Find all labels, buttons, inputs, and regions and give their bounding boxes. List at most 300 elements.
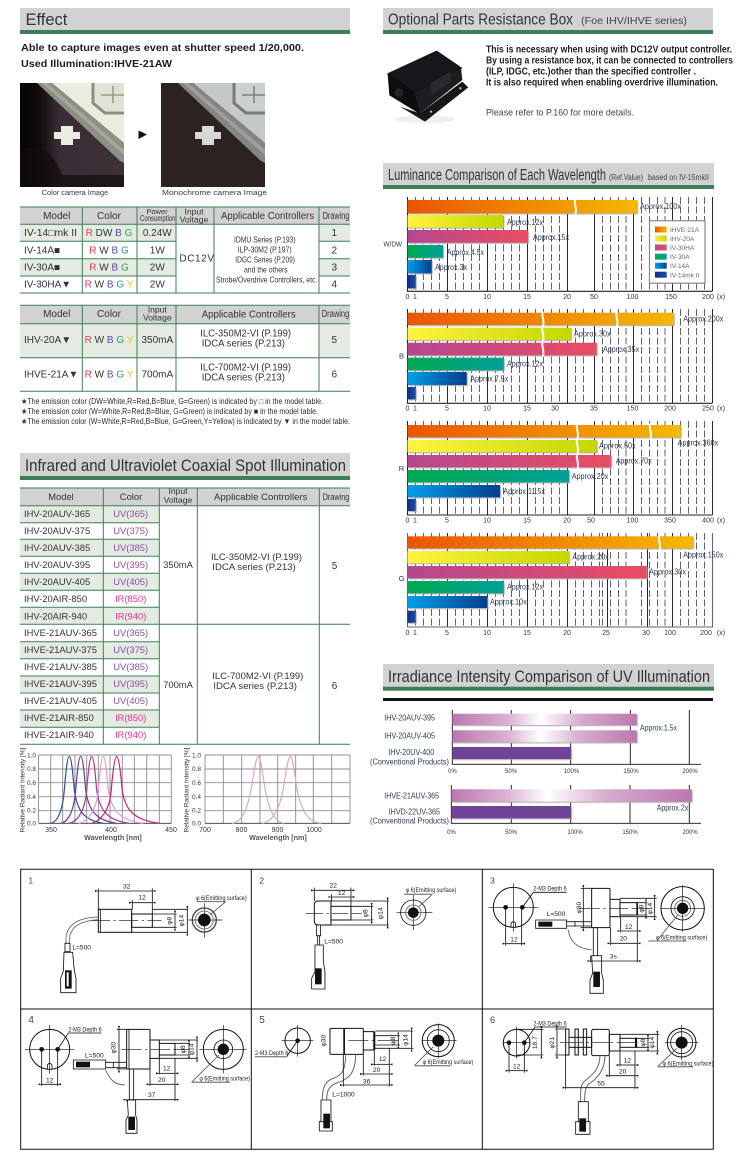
table: UV and IR models: IHVE-21AIR-940 [24, 729, 94, 740]
table: IV series models: IDGC Series (P.209) [235, 254, 295, 264]
chart: UV spectrum: Relative Radiant Intensity [%] [20, 747, 26, 832]
table: UV and IR models: IR(940) [115, 729, 146, 740]
chart: B luminance: (x) [717, 406, 725, 412]
drawing 3: φ 6(Emitting surface) [656, 934, 707, 941]
table: IV series models: and the others [244, 264, 288, 274]
chart: UV spectrum: 1.0 [27, 752, 36, 760]
table: IV series models: 2W [150, 262, 165, 273]
table: UV and IR models: IR(850) [115, 712, 146, 723]
drawing 5: φ30 [321, 1035, 328, 1047]
drawing 4: L=500 [85, 1052, 104, 1059]
table: UV and IR models: IHVE-21AUV-375 [24, 644, 97, 655]
table: IHV and IHVE models: R W B G Y [85, 369, 134, 380]
drawing 6 [490, 1015, 713, 1134]
drawing 6: φ21 [549, 1037, 556, 1049]
table: UV and IR models: 350mA [163, 559, 194, 570]
chart: W/DW luminance: Approx.3x [435, 262, 468, 272]
drawing 4: φ8 [180, 1045, 187, 1053]
table: UV and IR models: ILC-700M2-VI (P.199) [212, 670, 303, 681]
chart: R luminance: 400 [702, 518, 714, 524]
drawing 6: 55 [597, 1081, 605, 1088]
drawing 4: 12 [163, 1066, 171, 1073]
drawing 6: 12 [624, 1057, 631, 1064]
chart: IR spectrum: 0.6 [192, 780, 201, 787]
drawing 6: 6 [490, 1015, 495, 1025]
chart: W/DW luminance: 50 [590, 294, 598, 301]
chart: G luminance: Approx.30x [649, 566, 687, 576]
heading: Optional Parts Resistance Box: Optional Parts Resistance Box [388, 12, 573, 28]
heading: Luminance Comparison [383, 163, 714, 189]
table: IV series models: IV-14□mk II [24, 228, 77, 239]
chart: W/DW luminance: 1 [413, 294, 417, 301]
drawing 1: 32 [123, 883, 131, 890]
image captions: Color camera Image [42, 188, 108, 197]
chart: G luminance: G [399, 574, 405, 583]
table: IV series models: 2 [332, 245, 338, 256]
table: UV and IR models: IHV-20AUV-375 [24, 525, 90, 536]
table: UV and IR models: ILC-350M2-VI (P.199) [211, 551, 302, 562]
chart: B luminance: Approx.12x [507, 359, 544, 369]
chart: IHVE UV irradiance: 50% [505, 830, 518, 836]
chart: G luminance: Approx.12x [507, 582, 544, 592]
text block: resistance box description [486, 45, 733, 119]
chart: UV spectrum: 400 [105, 827, 117, 834]
chart: UV spectrum: 0.2 [27, 808, 36, 814]
table: UV and IR models: 5 [332, 561, 338, 572]
footnotes: emission colors: ★The emission color (DW=White,R=Red,B=Blue, G=Green) is indicated by □ in the model table. [21, 397, 323, 406]
chart: IHVE UV irradiance: Approx.2x [657, 803, 689, 813]
chart: W/DW luminance: 200 [702, 294, 714, 301]
chart: IHVE UV irradiance: 100% [567, 830, 583, 836]
chart: IR spectrum: Wavelength [nm] [249, 833, 307, 842]
chart: G luminance: Approx.10x [490, 597, 527, 607]
heading: Luminance Comparison: Luminance Comparison of Each Wavelength [388, 167, 606, 184]
drawing 3: 20 [620, 936, 627, 943]
drawing 4: 12 [46, 1077, 54, 1084]
table: IHV and IHVE models: IHV-20A▼ [24, 335, 71, 346]
table: UV and IR models: UV(405) [113, 695, 148, 706]
drawing 1: φ14 [178, 915, 185, 927]
chart: R luminance: 100 [627, 518, 638, 524]
table: IHV and IHVE models: Drawing [322, 309, 349, 320]
chart: IR spectrum: 1000 [306, 827, 322, 834]
chart: G luminance: Approx.150x [683, 550, 724, 560]
table: UV and IR models: Drawing [323, 491, 349, 502]
footnotes: emission colors [21, 397, 350, 426]
chart: R luminance: 0 [406, 518, 410, 524]
drawing 2 [259, 876, 456, 989]
chart: UV spectrum: 0.0 [27, 820, 36, 828]
table: IV series models: 3 [332, 262, 338, 273]
chart: B luminance: Approx.200x [683, 314, 724, 324]
chart: IHVE UV irradiance [370, 785, 701, 836]
chart: G luminance: 1 [413, 630, 417, 637]
heading: Luminance Comparison: based on IV-15mkII [648, 172, 709, 182]
drawing 2: 12 [338, 890, 346, 897]
chart: G luminance: 200 [700, 630, 712, 637]
chart: G luminance: 10 [483, 630, 491, 637]
image: resistance box [388, 52, 468, 123]
chart: UV spectrum [20, 747, 177, 842]
legend: luminance models: IV-14A [670, 263, 690, 270]
drawing 5: L=1000 [332, 1091, 355, 1098]
drawing 3: φ30 [576, 902, 583, 914]
drawing 6: φ 6(Emitting surface) [663, 1060, 713, 1067]
text block: effect description [21, 42, 304, 70]
chart: G luminance [399, 533, 725, 637]
heading: Irradiance Intensity [383, 664, 714, 701]
chart: W/DW luminance [384, 197, 725, 301]
drawing 3: 3s [610, 954, 617, 961]
table: UV and IR models: Voltage [164, 495, 193, 505]
drawing 5: φ8 [390, 1036, 397, 1045]
chart: IHV UV irradiance: 50% [505, 769, 518, 775]
table: UV and IR models: IHVE-21AIR-850 [24, 712, 94, 723]
table: UV and IR models: IDCA series (P.213) [212, 561, 296, 572]
heading: Effect: Effect [26, 11, 68, 29]
chart: B luminance: 10 [483, 406, 491, 412]
table: IV series models: IV-14A■ [24, 245, 60, 256]
chart: B luminance: 35 [590, 406, 598, 412]
drawing 4: 20 [158, 1077, 166, 1084]
drawing 2: 22 [330, 883, 337, 890]
drawing 5: 20 [373, 1067, 381, 1074]
table: UV and IR models: Applicable Controllers [214, 491, 308, 502]
drawing 6: 2-M3 Depth 6 [533, 1021, 567, 1028]
panel: dimension drawings grid [21, 869, 713, 1149]
table: IHV and IHVE models: ILC-350M2-VI (P.199) [200, 329, 291, 340]
drawing 6: φ8 [640, 1038, 647, 1047]
drawing 5: 12 [379, 1056, 387, 1063]
table: IV series models: R W B G [89, 262, 129, 273]
heading: Optional Parts Resistance Box [383, 8, 713, 34]
image: monochrome camera [161, 83, 265, 187]
chart: IHVE UV irradiance: 200% [682, 830, 698, 836]
table: UV and IR models: IHVE-21AUV-385 [24, 661, 97, 672]
chart: R luminance: Approx.360x [678, 438, 719, 448]
drawing 1: L=500 [72, 944, 91, 951]
drawing 6: 20 [619, 1068, 627, 1075]
chart: IHV UV irradiance: (Conventional Products) [370, 756, 449, 766]
table: IV series models: 1 [332, 228, 338, 239]
table: IHV and IHVE models: ILC-700M2-VI (P.199) [200, 363, 291, 374]
chart: UV spectrum: 0.4 [27, 794, 36, 801]
drawing 2: 2 [259, 876, 264, 886]
chart: W/DW luminance: Approx.15x [533, 232, 570, 242]
table: UV and IR models: UV(395) [113, 678, 148, 689]
chart: G luminance: 100 [664, 630, 676, 637]
drawing 5: 2-M3 Depth 6 [255, 1050, 289, 1057]
table: UV and IR models: UV(395) [113, 559, 148, 570]
chart: B luminance: Approx.35x [603, 344, 640, 354]
chart: R luminance: Approx.20x [572, 471, 609, 481]
table: IHV and IHVE models: 6 [332, 369, 338, 380]
legend: luminance models [650, 221, 705, 283]
heading: Infrared and Ultraviolet [20, 453, 350, 480]
drawing 5: φ 6(Emitting surface) [423, 1059, 473, 1066]
chart: G luminance: 20 [563, 630, 571, 637]
chart: R luminance [399, 421, 725, 524]
chart: G luminance: 5 [445, 630, 449, 637]
chart: B luminance [399, 309, 725, 412]
drawing 4 [25, 1015, 250, 1133]
footnotes: emission colors: ★The emission color (W=White,R=Red,B=Blue, G=Green,Y=Yellow) is indicated by ▼ in the model table. [21, 417, 350, 426]
chart: B luminance: 1 [413, 406, 417, 412]
image: color camera [20, 83, 124, 187]
chart: R luminance: Approx.70x [616, 456, 652, 466]
table: IV series models: IV-30A■ [24, 262, 60, 273]
chart: B luminance: 200 [664, 406, 676, 412]
text block: effect description: Able to capture images even at shutter speed 1/20,000. [21, 42, 304, 54]
table: UV and IR models: IHVE-21AUV-405 [24, 695, 97, 706]
table: IHV and IHVE models: Input [148, 305, 167, 315]
table: UV and IR models [20, 486, 350, 744]
heading: Effect [20, 8, 350, 34]
drawing 4: φ 6(Emitting surface) [199, 1075, 250, 1082]
drawing 1: φ 6(Emitting surface) [196, 895, 247, 902]
chart: W/DW luminance: W/DW [384, 240, 403, 249]
chart: IR spectrum: 800 [236, 827, 247, 834]
chart: B luminance: 5 [445, 406, 449, 412]
chart: IR spectrum: 900 [272, 827, 283, 834]
drawing 1 [28, 876, 247, 993]
table: UV and IR models: UV(385) [113, 542, 148, 553]
table: IHV and IHVE models: IDCA series (P.213) [202, 339, 285, 350]
chart: IHVE UV irradiance: (Conventional Products) [370, 816, 449, 826]
chart: IHVE UV irradiance: 0% [447, 830, 457, 836]
chart: W/DW luminance: 10 [483, 294, 491, 301]
table: UV and IR models: IR(850) [115, 593, 146, 604]
chart: IHV UV irradiance: IHV-20AUV-405 [384, 731, 435, 741]
chart: IHVE UV irradiance: IHVD-22UV-365 [389, 806, 440, 816]
chart: B luminance: 150 [627, 406, 638, 412]
table: IHV and IHVE models: IHVE-21A▼ [24, 369, 78, 380]
table: UV and IR models: 700mA [163, 679, 194, 690]
table: IV series models: 4 [332, 280, 338, 291]
image captions: Monochrome camera Image [162, 188, 267, 197]
chart: W/DW luminance: Approx.100x [640, 201, 682, 211]
drawing 3: 2-M3 Depth 6 [533, 885, 567, 892]
chart: B luminance: B [399, 351, 404, 360]
chart: IHV UV irradiance: 100% [564, 769, 580, 775]
chart: IHV UV irradiance [370, 710, 701, 775]
chart: IHV UV irradiance: Approx.1.5x [640, 723, 678, 733]
heading: Optional Parts Resistance Box: (Foe IHV/IHVE series) [581, 15, 687, 27]
table: UV and IR models: IHV-20AIR-940 [24, 610, 87, 621]
text block: effect description: Used Illumination:IHVE-21AW [21, 58, 172, 70]
drawing 6: 18.7 [532, 1036, 539, 1049]
chart: UV spectrum: 350 [45, 827, 57, 834]
chart: IR spectrum: 0.0 [192, 820, 201, 828]
chart: IHV UV irradiance: 0% [448, 769, 458, 775]
chart: W/DW luminance: Approx.12x [507, 217, 544, 227]
table: UV and IR models: Model [48, 491, 74, 502]
drawing 1: 1 [28, 876, 33, 886]
table: IHV and IHVE models: 700mA [141, 369, 173, 380]
table: IV series models: 1W [150, 245, 165, 256]
drawing 2: φ14 [378, 907, 385, 919]
legend: luminance models: IHV-20A [670, 236, 695, 243]
table: IV series models: IV-30HA▼ [24, 280, 71, 291]
chart: G luminance: 25 [602, 630, 610, 637]
chart: R luminance: (x) [717, 518, 725, 524]
drawing 2: φ8 [363, 909, 370, 917]
drawing 5: φ14 [403, 1034, 410, 1046]
table: IV series models: ILP-30M2 (P.197) [238, 244, 292, 254]
chart: B luminance: Approx.30x [574, 329, 611, 339]
drawing 1: φ8 [167, 916, 174, 925]
chart: W/DW luminance: 5 [445, 294, 449, 301]
chart: IHV UV irradiance: IHV-20UV-400 [388, 747, 435, 757]
chart: B luminance: 250 [702, 406, 714, 412]
legend: luminance models: IV-30A [670, 254, 690, 261]
chart: IR spectrum [184, 747, 350, 842]
table: UV and IR models: UV(375) [113, 644, 148, 655]
table: UV and IR models: Color [120, 491, 142, 502]
table: IV series models: Applicable Controllers [221, 211, 314, 222]
table: UV and IR models: IHV-20AIR-850 [24, 593, 87, 604]
chart: IR spectrum: 0.8 [192, 766, 201, 773]
legend: luminance models: IHVE-21A [670, 227, 700, 234]
table: UV and IR models: UV(385) [113, 661, 148, 672]
chart: R luminance: 10 [483, 518, 491, 524]
table: IHV and IHVE models: Applicable Controllers [202, 309, 296, 320]
drawing 4: 2-M3 Depth 6 [68, 1027, 102, 1034]
table: IHV and IHVE models [20, 305, 350, 391]
drawing 6: φ14 [649, 1037, 656, 1049]
chart: R luminance: 15 [523, 518, 531, 524]
table: UV and IR models: UV(365) [113, 627, 148, 638]
table: IV series models: Voltage [180, 214, 209, 224]
drawing 3: φ8 [638, 904, 645, 913]
table: UV and IR models: IHV-20AUV-385 [24, 542, 90, 553]
drawing 3: L=500 [547, 911, 566, 918]
drawing 4: 37 [148, 1092, 156, 1099]
table: IV series models: DC12V [179, 254, 215, 265]
table: IV series models: 2W [150, 280, 165, 291]
table: IHV and IHVE models: Voltage [143, 313, 172, 323]
heading: Infrared and Ultraviolet: Infrared and Ultraviolet Coaxial Spot Illumination [25, 456, 346, 475]
table: IV series models: R W B G [89, 245, 129, 256]
chart: G luminance: 0 [406, 630, 410, 637]
drawing 1: 12 [138, 895, 146, 902]
chart: B luminance: 15 [523, 406, 531, 412]
drawing 4: φ30 [110, 1042, 117, 1054]
drawing 3: 12 [510, 937, 518, 944]
table: UV and IR models: UV(405) [113, 576, 148, 587]
table: IV series models: Model [43, 211, 70, 222]
legend: luminance models: IV-30HA [670, 245, 695, 252]
drawing 3: 3 [490, 876, 495, 886]
chart: IR spectrum: Relative Radiant Intensity [%] [184, 747, 190, 832]
table: IV series models: Input [184, 207, 204, 217]
chart: W/DW luminance: Approx.4.5x [447, 247, 485, 257]
chart: IR spectrum: 1.0 [192, 752, 201, 760]
text block: resistance box description: (ILP, IDGC, etc.)other than the specified controller . [486, 67, 696, 78]
chart: W/DW luminance: 20 [563, 294, 571, 301]
chart: R luminance: 20 [563, 518, 571, 524]
drawing 4: 4 [28, 1015, 34, 1026]
chart: W/DW luminance: 15 [523, 294, 531, 301]
table: UV and IR models: 6 [332, 681, 338, 692]
chart: B luminance: Approx.7.5x [470, 374, 509, 384]
table: IV series models: Drawing [323, 211, 349, 222]
chart: R luminance: 350 [664, 518, 676, 524]
table: UV and IR models: IHV-20AUV-405 [24, 576, 90, 587]
table: IV series models [20, 207, 350, 293]
chart: W/DW luminance: 150 [665, 294, 677, 301]
legend: luminance models: IV-14mk II [670, 272, 699, 280]
table: UV and IR models: IHV-20AUV-395 [24, 559, 90, 570]
table: IV series models: R DW B G [86, 228, 133, 239]
drawing 5: 36 [363, 1078, 371, 1085]
chart: IR spectrum: 700 [199, 827, 211, 834]
chart: W/DW luminance: (x) [717, 294, 725, 301]
table: IV series models: Color [97, 211, 122, 222]
chart: W/DW luminance: 100 [627, 294, 638, 301]
chart: R luminance: 1 [413, 518, 417, 524]
table: UV and IR models: UV(375) [113, 525, 148, 536]
drawing 4: φ14 [188, 1043, 195, 1055]
drawing 5: 5 [259, 1015, 265, 1026]
table: IV series models: Power [146, 207, 168, 216]
chart: IR spectrum: 0.2 [192, 808, 201, 814]
heading: Luminance Comparison: (Ref.Value) [609, 172, 643, 182]
drawing 6: 12 [513, 1063, 521, 1070]
table: IV series models: Consumption [140, 214, 176, 223]
table: IHV and IHVE models: Model [43, 309, 70, 320]
table: UV and IR models: IHVE-21AUV-365 [24, 627, 97, 638]
drawing 3: φ14 [647, 903, 654, 915]
chart: IHV UV irradiance: IHV-20AUV-395 [384, 712, 435, 722]
drawing 2: L=500 [324, 939, 343, 946]
drawing 3 [488, 876, 707, 993]
table: IHV and IHVE models: IDCA series (P.213) [202, 373, 285, 384]
chart: IHVE UV irradiance: 150% [622, 830, 638, 836]
chart: IHVE UV irradiance: IHVE-21AUV-365 [384, 790, 439, 800]
chart: IHV UV irradiance: 150% [623, 769, 639, 775]
table: IV series models: 0.24W [143, 228, 172, 239]
chart: UV spectrum: 0.8 [27, 766, 36, 773]
table: UV and IR models: UV(365) [113, 508, 148, 519]
table: IHV and IHVE models: R W B G Y [85, 335, 134, 346]
chart: R luminance: Approx.11.5x [503, 486, 546, 496]
table: UV and IR models: IDCA series (P.213) [213, 680, 297, 691]
table: IV series models: Strobe/Overdrive Controllers, etc. [216, 274, 317, 284]
chart: R luminance: 5 [445, 518, 449, 524]
table: IV series models: IDMU Series (P.193) [234, 234, 296, 244]
arrow: color to monochrome [138, 130, 147, 139]
chart: UV spectrum: 450 [165, 827, 177, 834]
chart: G luminance: 15 [523, 630, 531, 637]
chart: G luminance: 30 [642, 630, 650, 637]
chart: R luminance: Approx.50x [599, 440, 636, 450]
chart: IHV UV irradiance: 200% [682, 769, 698, 775]
chart: W/DW luminance: 0 [406, 294, 410, 301]
table: UV and IR models: IR(940) [115, 610, 146, 621]
image captions [42, 188, 267, 197]
chart: B luminance: 30 [551, 406, 559, 412]
chart: UV spectrum: 0.6 [27, 780, 36, 787]
text block: resistance box description: Please refer to P.160 for more details. [486, 108, 634, 118]
chart: B luminance: 0 [406, 406, 410, 412]
table: UV and IR models: Input [168, 486, 188, 496]
table: IHV and IHVE models: 350mA [141, 335, 173, 346]
table: UV and IR models: IHVE-21AUV-395 [24, 678, 97, 689]
table: UV and IR models: IHV-20AUV-365 [24, 508, 90, 519]
table: IHV and IHVE models: Color [97, 309, 122, 320]
chart: R luminance: 50 [587, 518, 595, 524]
